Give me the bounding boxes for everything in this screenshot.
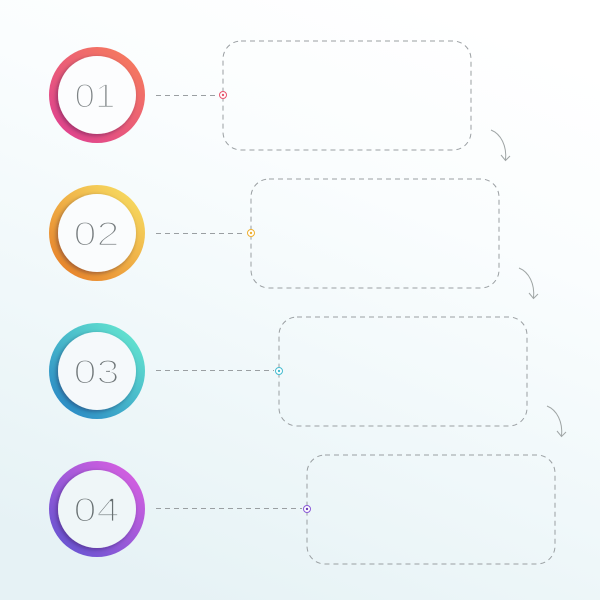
badge 03: 03 — [74, 354, 120, 392]
connector 01 — [156, 94, 218, 96]
step 01 — [49, 41, 510, 160]
box 02 — [251, 179, 499, 288]
badge 01 — [49, 47, 145, 143]
arrow 03 — [547, 406, 566, 436]
badge 04: 04 — [74, 492, 120, 530]
node 01 — [220, 92, 226, 98]
step 03 — [49, 317, 566, 436]
connector 04 — [156, 508, 302, 510]
step 04 — [49, 455, 555, 564]
node 02 — [248, 230, 254, 236]
badge 01: 01 — [74, 78, 116, 116]
step 02 — [49, 179, 538, 298]
arrow 01 — [491, 130, 510, 160]
box 01 — [223, 41, 471, 150]
node 03 — [276, 368, 282, 374]
connector 02 — [156, 232, 246, 234]
badge 02: 02 — [74, 216, 120, 254]
badge 03 — [49, 323, 145, 419]
badge 02 — [49, 185, 145, 281]
badge 04 — [49, 461, 145, 557]
node 04 — [304, 506, 310, 512]
arrow 02 — [519, 268, 538, 298]
box 03 — [279, 317, 527, 426]
box 04 — [307, 455, 555, 564]
connector 03 — [156, 370, 274, 372]
